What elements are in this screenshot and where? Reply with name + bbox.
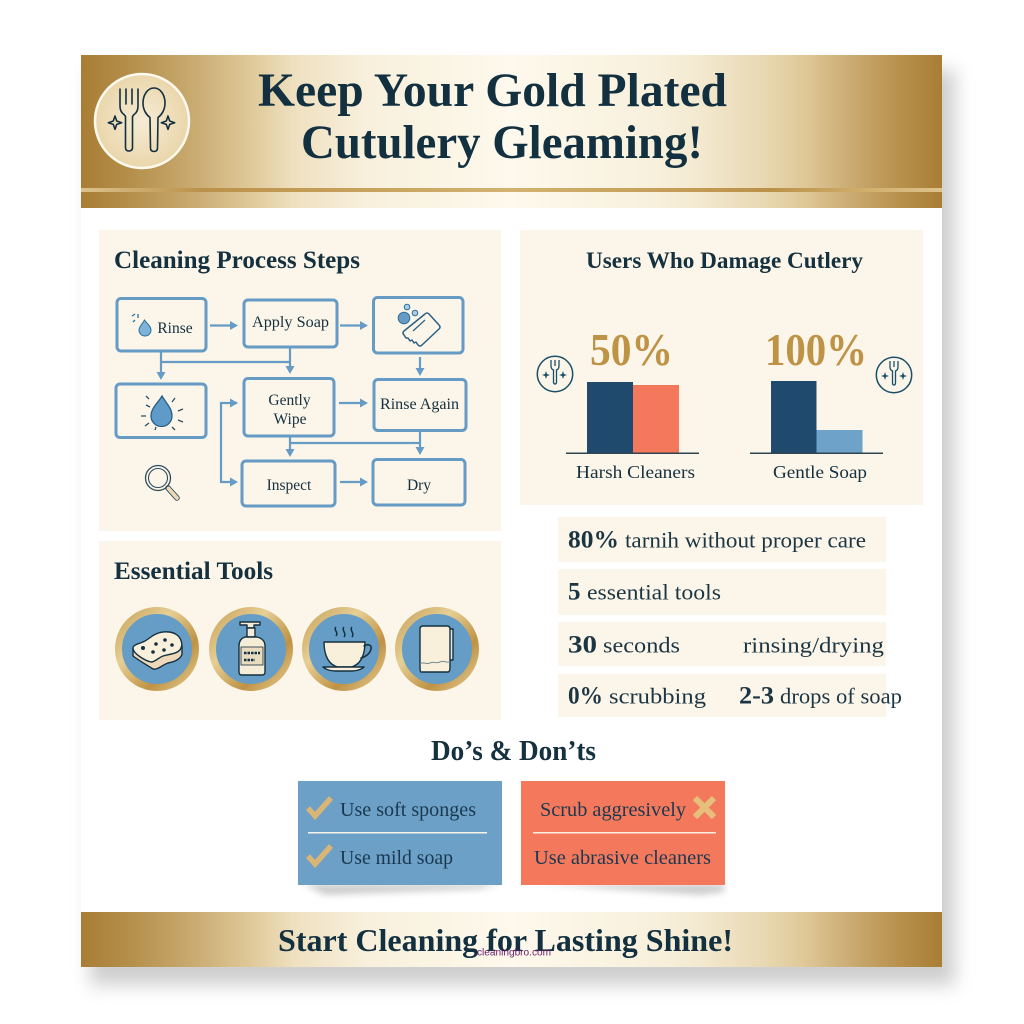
stat: 0% scrubbing, 2-3 drops of soap bbox=[558, 674, 902, 717]
stat: 80% tarnish bbox=[558, 517, 886, 562]
icon: check mark bbox=[308, 798, 331, 816]
stat: 0% scrubbing, 2-3 drops of soap: 2-3 bbox=[739, 682, 774, 710]
icon: magnifying glass bbox=[146, 466, 177, 498]
panel: don'ts: Scrub aggresively bbox=[540, 799, 686, 821]
step: water drop icon bbox=[116, 384, 206, 438]
stat: 5 essential tools bbox=[558, 569, 886, 615]
icon: cup of warm water bbox=[306, 610, 382, 688]
stat: 0% scrubbing, 2-3 drops of soap: drops of soap bbox=[780, 684, 902, 708]
panel: do's bbox=[298, 781, 502, 895]
panel: do's: Use mild soap bbox=[340, 847, 453, 869]
icon: fork badge right bbox=[876, 357, 912, 393]
icon: soap bottle bbox=[212, 610, 290, 688]
title: Cutulery Gleaming! bbox=[301, 116, 703, 169]
step: dry: Dry bbox=[407, 477, 431, 494]
heading: essential tools: Essential Tools bbox=[114, 558, 273, 585]
bar chart: harsh cleaners: 50% bbox=[590, 324, 673, 375]
flowchart arrows bbox=[156, 321, 424, 486]
step: rinse: Rinse bbox=[157, 320, 193, 337]
stat: 30 seconds rinsing and drying: 30 bbox=[568, 632, 597, 658]
stat: 0% scrubbing, 2-3 drops of soap: scrubbing bbox=[609, 684, 706, 708]
heading: do's and don'ts: Do’s & Don’ts bbox=[431, 736, 596, 767]
bar chart: gentle soap: Gentle Soap bbox=[773, 462, 867, 482]
step: gently wipe bbox=[244, 378, 334, 436]
footer banner: Start Cleaning for Lasting Shine! bbox=[278, 922, 733, 958]
panel: cleaning process steps bbox=[99, 230, 501, 531]
icon: fork badge left bbox=[537, 356, 573, 392]
heading: cleaning process steps: Cleaning Process Steps bbox=[114, 247, 360, 274]
stat: 30 seconds rinsing and drying bbox=[558, 622, 886, 666]
stat: 30 seconds rinsing and drying: seconds bbox=[603, 632, 680, 658]
icon: fork and spoon emblem bbox=[95, 74, 189, 168]
header banner bbox=[81, 55, 942, 208]
step: rinse bbox=[117, 298, 206, 351]
stat: 5 essential tools: essential tools bbox=[587, 580, 721, 604]
heading: users who damage cutlery: Users Who Damage Cutlery bbox=[586, 248, 863, 273]
icon: check mark bbox=[308, 846, 331, 864]
stat: 5 essential tools: 5 bbox=[568, 578, 580, 606]
panel: don'ts: Use abrasive cleaners bbox=[534, 847, 711, 869]
step: inspect: Inspect bbox=[267, 477, 312, 494]
icon: sponge bbox=[118, 610, 196, 688]
icon: cross mark bbox=[695, 798, 714, 817]
panel: don'ts bbox=[521, 781, 725, 895]
panel: users who damage cutlery bbox=[520, 230, 923, 505]
step: apply soap bbox=[244, 300, 337, 347]
panel: essential tools bbox=[99, 541, 501, 720]
step: soap bar icon bbox=[374, 298, 463, 353]
step: inspect bbox=[242, 461, 335, 506]
icon: towel bbox=[398, 610, 476, 688]
footer banner bbox=[81, 912, 942, 967]
stat: 30 seconds rinsing and drying: rinsing/drying bbox=[743, 632, 884, 658]
step: rinse again bbox=[374, 380, 466, 430]
step: gently wipe: Wipe bbox=[274, 411, 307, 428]
panel: do's: Use soft sponges bbox=[340, 799, 476, 821]
step: apply soap: Apply Soap bbox=[252, 314, 329, 331]
stat: 80% tarnish: 80% bbox=[568, 526, 619, 554]
bar chart: gentle soap bbox=[750, 324, 883, 482]
bar chart: gentle soap: 100% bbox=[765, 324, 867, 375]
stat: 0% scrubbing, 2-3 drops of soap: 0% bbox=[568, 682, 603, 710]
bar chart: harsh cleaners: Harsh Cleaners bbox=[576, 462, 695, 482]
stat: 80% tarnish: tarnih without proper care bbox=[625, 528, 866, 552]
title: Keep Your Gold Plated bbox=[258, 64, 727, 117]
step: rinse again: Rinse Again bbox=[380, 396, 459, 413]
watermark: cleaningbro.com bbox=[477, 946, 551, 958]
title bbox=[258, 64, 727, 169]
bar chart: harsh cleaners bbox=[566, 324, 699, 482]
step: dry bbox=[373, 460, 465, 505]
step: gently wipe: Gently bbox=[268, 392, 311, 409]
